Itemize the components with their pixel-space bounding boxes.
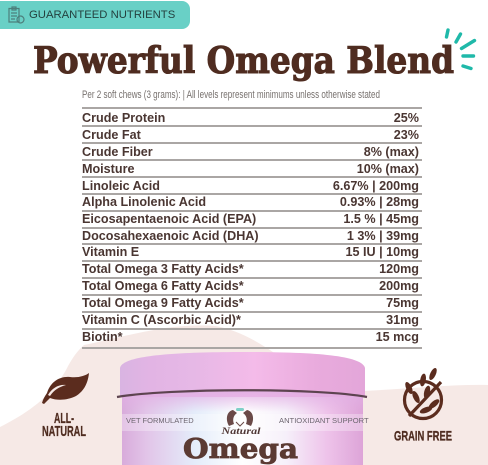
row: omega 3: 120mg (379, 262, 419, 276)
badge label: GUARANTEED NUTRIENTS (29, 9, 175, 21)
jar label: antioxidant support: ANTIOXIDANT SUPPORT (279, 416, 369, 425)
row: crude fat: 23% (394, 128, 419, 142)
row: biotin: Biotin* (82, 330, 123, 344)
row: DHA: Docosahexaenoic Acid (DHA) (82, 229, 259, 243)
icon: grain free (402, 368, 444, 420)
serving note: Per 2 soft chews (3 grams): | All levels represent minimums unless otherwise stated (82, 89, 380, 101)
jar logo: Natural (220, 426, 261, 436)
row: alpha linolenic acid (82, 195, 419, 209)
row: DHA (82, 229, 419, 243)
row: vitamin C: 31mg (386, 313, 419, 327)
jar logo (220, 408, 261, 436)
row: omega 9 (82, 296, 419, 310)
icon: teal sparkle rays (444, 28, 476, 70)
row: biotin: 15 mcg (376, 330, 419, 344)
row: DHA: 1 3% | 39mg (347, 229, 419, 243)
row: biotin (82, 330, 419, 344)
row: vitamin C (82, 313, 419, 327)
icon: leaf (42, 373, 89, 404)
row: crude protein (82, 111, 419, 125)
row: crude fiber (82, 145, 419, 159)
nutrient table (82, 107, 422, 349)
row: omega 6: Total Omega 6 Fatty Acids* (82, 279, 244, 293)
title: Powerful Omega Blend (33, 40, 454, 82)
row: moisture: 10% (max) (357, 162, 419, 176)
row: moisture (82, 162, 419, 176)
row: linoleic acid (82, 179, 419, 193)
row: omega 6 (82, 279, 419, 293)
jar product name: Omega (183, 434, 298, 465)
row: alpha linolenic acid: Alpha Linolenic Acid (82, 195, 206, 209)
row: crude protein: 25% (394, 111, 419, 125)
row: EPA: Eicosapentaenoic Acid (EPA) (82, 212, 256, 226)
row: EPA: 1.5 % | 45mg (343, 212, 419, 226)
row: crude fat (82, 128, 419, 142)
row: crude protein: Crude Protein (82, 111, 165, 125)
row: omega 3: Total Omega 3 Fatty Acids* (82, 262, 244, 276)
row: vitamin E (82, 245, 419, 259)
row: alpha linolenic acid: 0.93% | 28mg (340, 195, 419, 209)
row: linoleic acid: 6.67% | 200mg (333, 179, 419, 193)
row: vitamin C: Vitamin C (Ascorbic Acid)* (82, 313, 241, 327)
row: EPA (82, 212, 419, 226)
row: vitamin E: Vitamin E (82, 245, 139, 259)
row: omega 9: Total Omega 9 Fatty Acids* (82, 296, 244, 310)
row: omega 6: 200mg (379, 279, 419, 293)
row: crude fiber: 8% (max) (364, 145, 419, 159)
row: crude fat: Crude Fat (82, 128, 141, 142)
label: all-natural (42, 411, 86, 438)
label: all-natural: ALL- (54, 411, 74, 427)
row: moisture: Moisture (82, 162, 134, 176)
row: vitamin E: 15 IU | 10mg (345, 245, 419, 259)
row: crude fiber: Crude Fiber (82, 145, 153, 159)
badge: guaranteed nutrients (0, 1, 190, 29)
jar label: vet formulated: VET FORMULATED (126, 416, 194, 425)
row: linoleic acid: Linoleic Acid (82, 179, 160, 193)
row: omega 3 (82, 262, 419, 276)
row: omega 9: 75mg (386, 296, 419, 310)
icon: clipboard (8, 6, 25, 24)
